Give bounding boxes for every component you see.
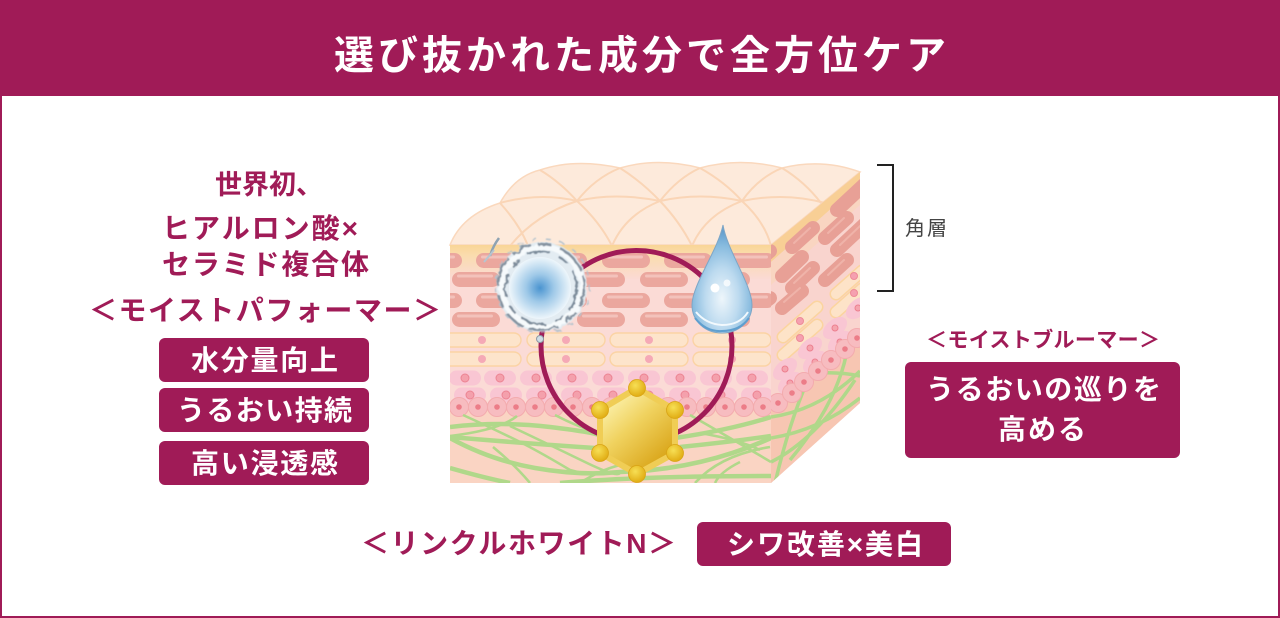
badge: circulation: [905, 362, 1180, 458]
side spinous cells: [773, 298, 860, 394]
badge: penetration: [159, 441, 369, 485]
heading: ceramide complex: セラミド複合体: [162, 249, 369, 280]
ingredient name: ＜モイストパフォーマー＞: [89, 295, 441, 326]
bracket: horny layer: [877, 165, 893, 291]
spinous layer cells: [449, 370, 773, 402]
panel: bottom ingredient: [361, 522, 951, 566]
skin surface: [450, 162, 860, 246]
header bar: [0, 0, 1280, 96]
ring linking the ingredients: [541, 250, 732, 442]
ingredient name: ＜リンクルホワイトN＞: [361, 528, 676, 559]
label: horny layer: 角層: [905, 217, 947, 240]
panel: left ingredient text: [89, 170, 441, 485]
collagen fibers: [450, 415, 771, 483]
side horny cells: [762, 183, 866, 308]
side face: [771, 172, 860, 483]
badge: moisture: 水分量向上: [191, 345, 338, 376]
icon: water splash sphere: [484, 238, 590, 342]
badge: circulation: うるおいの巡りを: [926, 374, 1161, 405]
heading: hyaluronic acid: ヒアルロン酸×: [162, 213, 358, 244]
badge: circulation: 高める: [998, 414, 1086, 445]
side fibers: [771, 358, 860, 480]
ingredient name: ＜モイストブルーマー＞: [926, 328, 1160, 352]
basal layer cells: [450, 398, 772, 416]
horny layer cells: [450, 253, 771, 327]
icon: water droplet: [692, 225, 752, 333]
panel: right ingredient: [905, 328, 1180, 458]
side granular cells: [783, 271, 862, 355]
skin cross-section illustration: [449, 162, 862, 483]
side basal cells: [768, 328, 866, 412]
badge: penetration: 高い浸透感: [191, 448, 338, 479]
badge: lasting hydration: うるおい持続: [177, 395, 352, 426]
badge: moisture: [159, 338, 369, 382]
icon: golden hexagon molecule: [592, 380, 684, 482]
title: 選び抜かれた成分で全方位ケア: [334, 34, 946, 78]
badge: lasting hydration: [159, 388, 369, 432]
heading: world first: 世界初、: [215, 170, 323, 200]
granular layer cells: [443, 333, 771, 366]
badge: wrinkle and whitening: [697, 522, 951, 566]
front face: [450, 245, 771, 483]
badge: wrinkle and whitening: シワ改善×美白: [727, 529, 923, 560]
